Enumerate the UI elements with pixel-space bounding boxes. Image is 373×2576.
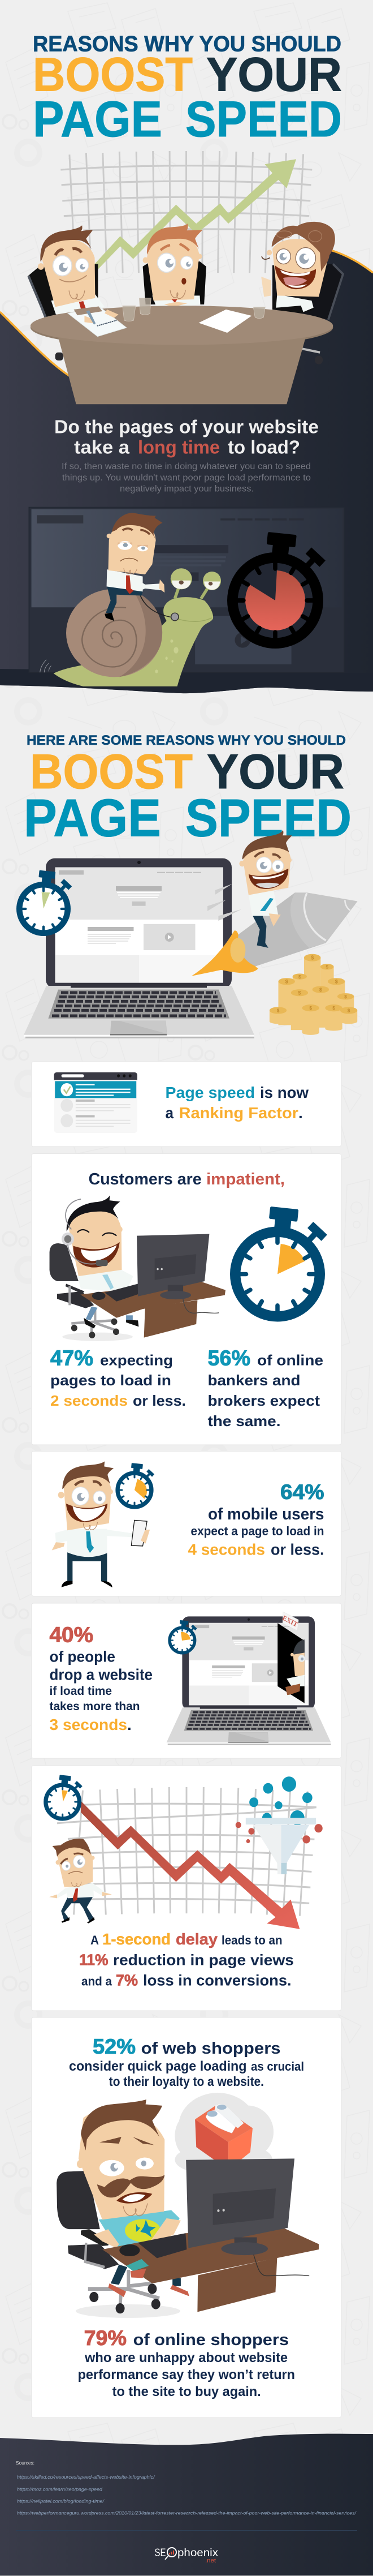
card: ranking factor	[32, 1062, 341, 1147]
stat: 47 percent	[50, 1347, 186, 1409]
snail	[40, 568, 221, 686]
businesswoman right	[261, 222, 343, 373]
stat: 64 percent: or less.	[271, 1541, 324, 1559]
speed streaks	[207, 884, 241, 921]
stat: 40 percent	[50, 1624, 153, 1733]
browser mock-up	[29, 507, 344, 672]
thought cloud with shoebox	[175, 2093, 274, 2174]
rider	[239, 830, 292, 948]
stat: 40 percent: 40%	[50, 1624, 93, 1647]
gold coin stacks: $	[309, 1005, 312, 1011]
sources list: https://moz.com/learn/seo/page-speed	[17, 2487, 103, 2492]
second title: BOOST	[30, 745, 193, 799]
logo: SEO phoenix: .net	[205, 2557, 216, 2564]
logo: SEO phoenix: phoenix	[177, 2547, 219, 2559]
stat: 56 percent: 56%	[208, 1347, 250, 1371]
stat: 52 percent: consider quick page loading	[69, 2059, 246, 2074]
gold coin stacks: $	[348, 1007, 350, 1014]
stat: 79 percent: of online shoppers	[133, 2331, 289, 2349]
large stopwatch	[235, 1207, 327, 1316]
stat: 64 percent: 64%	[280, 1480, 324, 1504]
stat: 52 percent: of web shoppers	[141, 2040, 281, 2058]
stat: 40 percent: drop a website	[50, 1666, 153, 1684]
ranking factor text: Page speed	[165, 1084, 255, 1101]
card: one second delay	[32, 1766, 341, 2011]
small stopwatch	[46, 1775, 83, 1819]
card heading: impatient,	[206, 1170, 285, 1188]
stat: 47 percent: expecting	[100, 1352, 173, 1369]
sad man	[49, 1839, 112, 1924]
gold coin stacks: $	[332, 1005, 335, 1011]
card: mobile users	[32, 1451, 341, 1596]
stat: 56 percent: the same.	[208, 1412, 280, 1429]
delay stat text: leads to an	[222, 1933, 283, 1947]
main title: SPEED	[185, 91, 342, 147]
second title	[24, 733, 352, 848]
stat: 56 percent	[208, 1347, 323, 1429]
stat: 40 percent: of people	[50, 1648, 115, 1665]
gold coin stacks: $	[311, 955, 314, 961]
businessman centre	[143, 224, 206, 309]
question heading: Do the pages of your website	[54, 417, 319, 437]
question heading: take a	[74, 436, 130, 457]
stat: 56 percent: of online	[257, 1352, 323, 1369]
falling chart illustration	[49, 1776, 323, 1929]
stat: 79 percent	[78, 2326, 295, 2399]
illustration: support agent at desk	[50, 1195, 225, 1341]
rocket, rider and coins	[192, 830, 358, 1035]
delay stat text: 1-second	[102, 1930, 171, 1948]
gold coin stacks: $	[344, 994, 347, 999]
stat: 56 percent: bankers and	[208, 1372, 301, 1389]
stat: 79 percent: who are unhappy about website	[84, 2350, 288, 2365]
dark hero background	[0, 249, 373, 693]
stat: 52 percent: as crucial	[251, 2059, 304, 2073]
main title	[33, 32, 342, 147]
stat: 79 percent: to the site to buy again.	[112, 2384, 261, 2399]
stat: 40 percent: takes more than	[50, 1700, 140, 1713]
gold coin stacks: $	[319, 986, 323, 993]
stat: 52 percent: 52%	[93, 2035, 136, 2058]
question body text: negatively impact your business.	[120, 484, 254, 494]
funnel with dots	[236, 1776, 323, 1874]
gold coin stacks: $	[298, 974, 301, 980]
delay stat text: and a	[81, 1974, 112, 1988]
meeting table	[31, 306, 333, 404]
stat: 52 percent	[69, 2035, 304, 2089]
gold coin stacks	[270, 954, 357, 1035]
delay stat text: delay	[176, 1930, 218, 1948]
delay stat text: loss in conversions.	[143, 1972, 292, 1989]
main title: BOOST	[33, 48, 193, 101]
delay stat text: 11%	[79, 1951, 109, 1969]
stat: 64 percent: of mobile users	[208, 1505, 324, 1523]
ranking factor text	[165, 1084, 309, 1122]
logo: SEO phoenix	[155, 2547, 219, 2564]
laptop with exit door	[167, 1612, 331, 1745]
delay stat text: A	[90, 1933, 99, 1947]
stat: 64 percent: 4 seconds	[188, 1541, 265, 1559]
sheet of paper	[198, 310, 251, 333]
main title: PAGE	[33, 91, 162, 147]
exit door and man leaving	[277, 1612, 305, 1703]
exit door and man leaving: EXIT	[281, 1613, 299, 1629]
stat: 47 percent: pages to load in	[50, 1372, 171, 1389]
red stopwatch	[232, 532, 326, 643]
card: customers are impatient	[32, 1154, 341, 1445]
notepad and writing hand	[68, 307, 127, 337]
second title: HERE ARE SOME REASONS WHY YOU SHOULD	[27, 733, 346, 748]
falling red arrow	[81, 1801, 300, 1929]
gold coin stacks: $	[298, 990, 301, 996]
fast stopwatch	[19, 870, 72, 933]
question body text: If so, then waste no time in doing whatever you can to speed	[62, 462, 311, 471]
rising green arrow	[95, 159, 296, 270]
question body text: things up. You wouldn't want poor page load performance to	[62, 473, 311, 483]
card heading: Customers are	[89, 1170, 202, 1188]
card: web shoppers	[32, 2017, 341, 2418]
main title: REASONS WHY YOU SHOULD	[33, 32, 341, 57]
stat: 47 percent: 47%	[50, 1347, 93, 1371]
question heading: long time	[138, 436, 220, 457]
sources list: https://neilpatel.com/blog/loading-time/	[17, 2499, 105, 2504]
delay stat text	[79, 1930, 294, 1989]
stat: 64 percent: expect a page to load in	[191, 1524, 324, 1538]
sources list: Sources:	[16, 2460, 34, 2466]
card: people drop a website	[32, 1603, 341, 1758]
question heading	[54, 417, 319, 457]
sources list: https://skilled.co/resources/speed-affects-website-infographic/	[17, 2475, 155, 2480]
man riding the snail	[105, 513, 179, 621]
drinking glasses	[123, 298, 265, 321]
gold coin stacks: $	[335, 978, 339, 985]
icon: search results page	[54, 1072, 137, 1133]
logo: SEO phoenix: SE	[155, 2547, 166, 2559]
second title: PAGE	[24, 788, 161, 848]
illustration: man with phone	[52, 1461, 150, 1587]
rocket flame	[192, 930, 258, 976]
footer	[0, 2434, 373, 2576]
delay stat text: 7%	[116, 1971, 138, 1989]
laptop	[24, 858, 254, 1038]
businessman left	[28, 225, 105, 360]
question heading: to load?	[228, 436, 300, 457]
ranking factor text: Ranking Factor	[179, 1104, 298, 1122]
chart grid	[57, 1787, 316, 1916]
small stopwatch	[118, 1463, 154, 1507]
stat: 40 percent: 3 seconds	[50, 1716, 127, 1733]
small stopwatch	[170, 1620, 197, 1653]
stat: 56 percent: brokers expect	[208, 1392, 320, 1409]
delay stat text: reduction in page views	[113, 1952, 294, 1969]
stat: 52 percent: to their loyalty to a website.	[109, 2074, 264, 2089]
stat: 79 percent: performance say they won’t return	[78, 2367, 295, 2382]
sources list: https://webperformanceguru.wordpress.com/2010/01/23/latest-forrester-research-released-the-impact-of-poor-web-site-performance-in-financial-services/	[17, 2511, 357, 2516]
illustration: shopper at desk	[57, 2100, 319, 2318]
sources list	[16, 2460, 357, 2516]
stat: 64 percent	[188, 1480, 324, 1559]
ranking factor text: .	[298, 1104, 303, 1122]
main title: YOUR	[206, 48, 342, 101]
stat: 79 percent: 79%	[84, 2326, 127, 2350]
rocket body	[230, 892, 358, 966]
stat: 47 percent: 2 seconds	[50, 1392, 128, 1409]
ranking factor text: a	[165, 1104, 174, 1122]
card heading	[89, 1170, 285, 1188]
stat: 47 percent: or less.	[133, 1392, 186, 1409]
gold coin stacks: $	[277, 1007, 280, 1014]
slow website illustration	[29, 507, 344, 686]
gold coin stacks: $	[326, 964, 328, 970]
question body text	[62, 462, 311, 494]
second title: SPEED	[185, 788, 352, 848]
chart grid	[60, 151, 312, 273]
second title: YOUR	[207, 745, 344, 799]
ranking factor text: is now	[260, 1084, 309, 1101]
gold coin stacks: $	[285, 978, 289, 985]
stat: 40 percent: .	[127, 1716, 132, 1733]
meeting illustration	[28, 151, 343, 404]
stat: 40 percent: if load time	[50, 1685, 112, 1698]
